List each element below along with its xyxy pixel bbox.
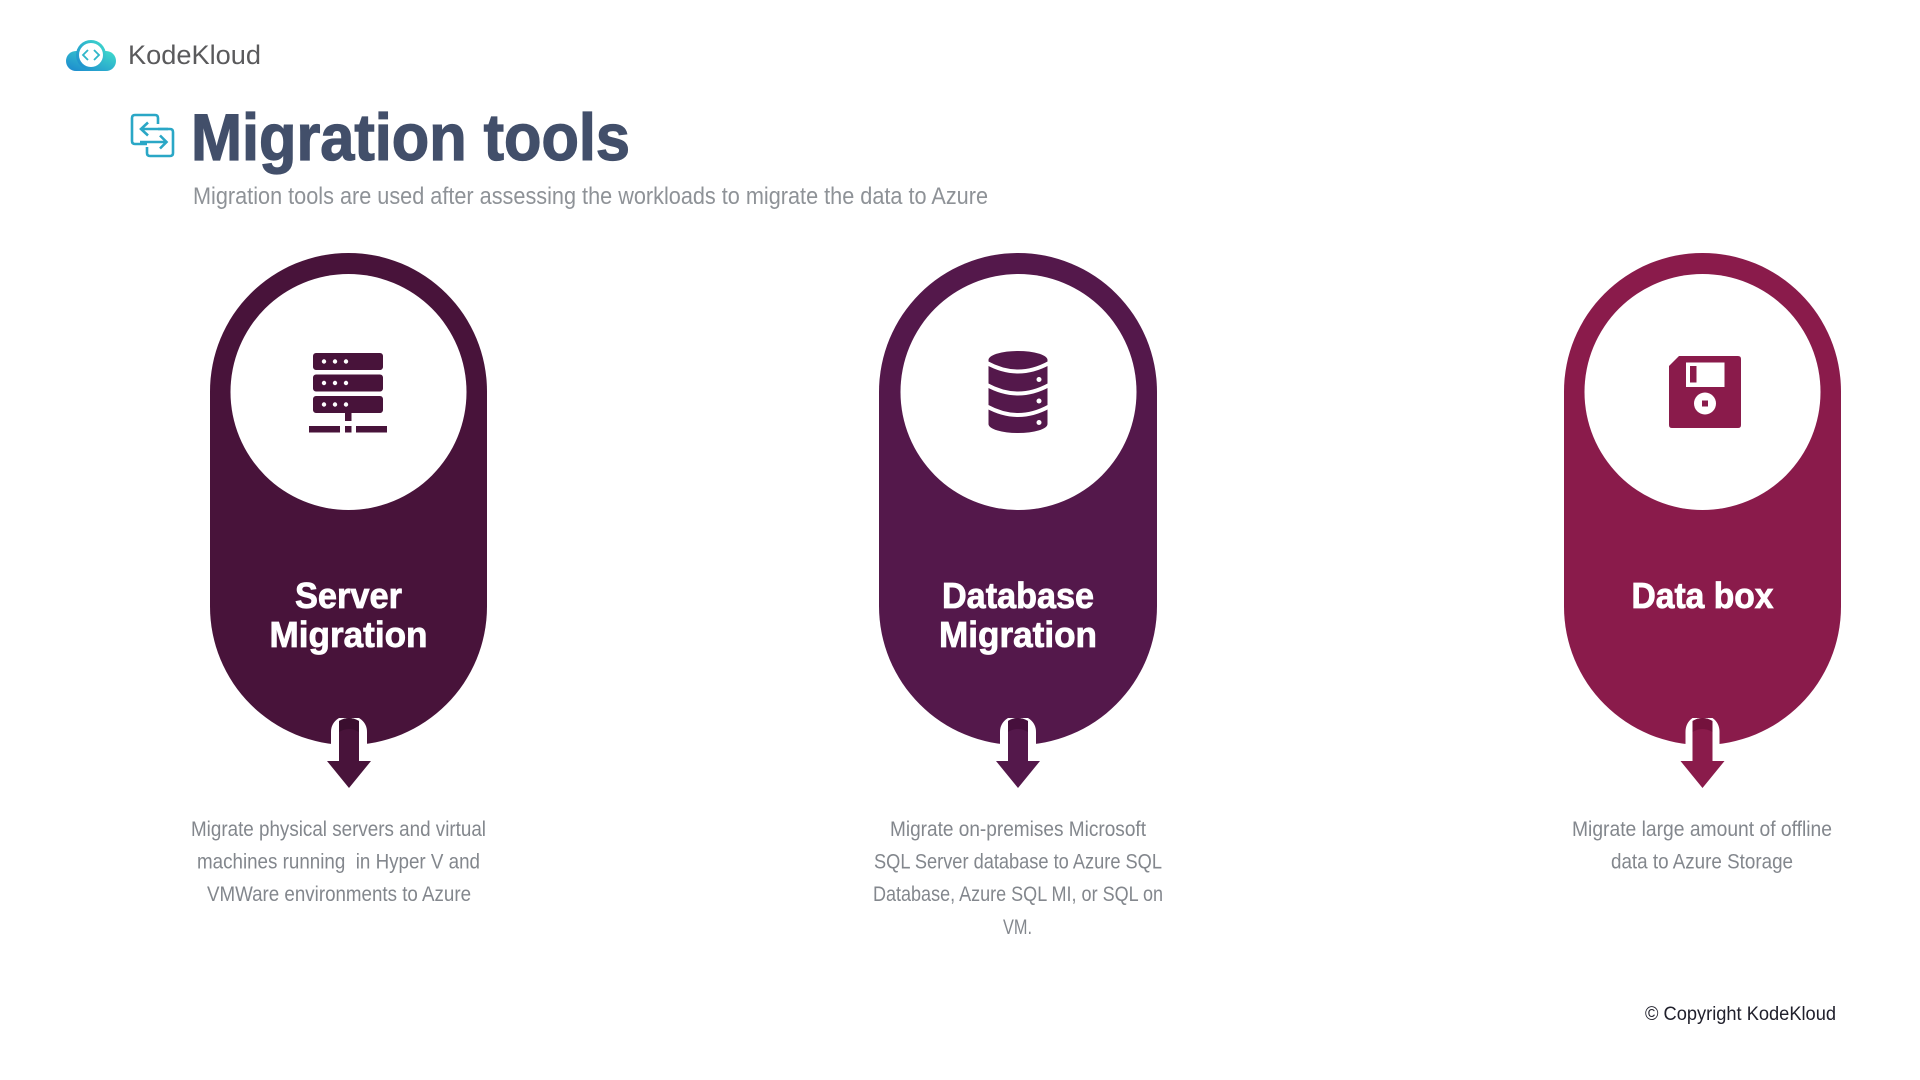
heading: Data box [1632, 575, 1774, 616]
description: VM. [1003, 916, 1032, 939]
heading: Database [942, 575, 1094, 616]
icon: database [987, 351, 1049, 433]
description [873, 818, 1163, 939]
copyright: © Copyright KodeKloud [1645, 1004, 1836, 1025]
heading [939, 575, 1097, 655]
description: Migrate on-premises Microsoft [890, 818, 1146, 841]
arrow [996, 718, 1040, 788]
arrow [327, 718, 371, 788]
capsule [1564, 253, 1841, 745]
title: Migration tools [191, 100, 630, 174]
description: Migrate large amount of offline [1572, 818, 1832, 841]
panel: database migration [873, 253, 1163, 939]
heading: Server [295, 575, 402, 616]
description [1572, 818, 1832, 874]
icon: cloud [66, 40, 116, 71]
icon circle [230, 274, 466, 510]
description: data to Azure Storage [1611, 850, 1793, 874]
capsule [210, 253, 487, 745]
icon: floppy disk [1669, 356, 1741, 428]
description: SQL Server database to Azure SQL [874, 850, 1162, 874]
subtitle: Migration tools are used after assessing the workloads to migrate the data to Azure [193, 183, 988, 210]
panel: server migration [191, 253, 487, 906]
panel: data box [1564, 253, 1841, 874]
description: Database, Azure SQL MI, or SQL on [873, 883, 1163, 906]
heading: Migration [270, 614, 428, 655]
brand name: KodeKloud [128, 40, 261, 70]
description: machines running in Hyper V and [197, 850, 480, 874]
description: Migrate physical servers and virtual [191, 818, 486, 841]
capsule [879, 253, 1157, 745]
arrow [1680, 718, 1724, 788]
description [191, 818, 486, 906]
logo: KodeKloud [66, 40, 261, 71]
icon: migration arrows [132, 115, 173, 156]
description: VMWare environments to Azure [207, 883, 471, 906]
heading [270, 575, 428, 655]
icon circle [900, 274, 1136, 510]
heading: Migration [939, 614, 1097, 655]
icon: server rack [309, 353, 387, 432]
icon circle [1584, 274, 1820, 510]
